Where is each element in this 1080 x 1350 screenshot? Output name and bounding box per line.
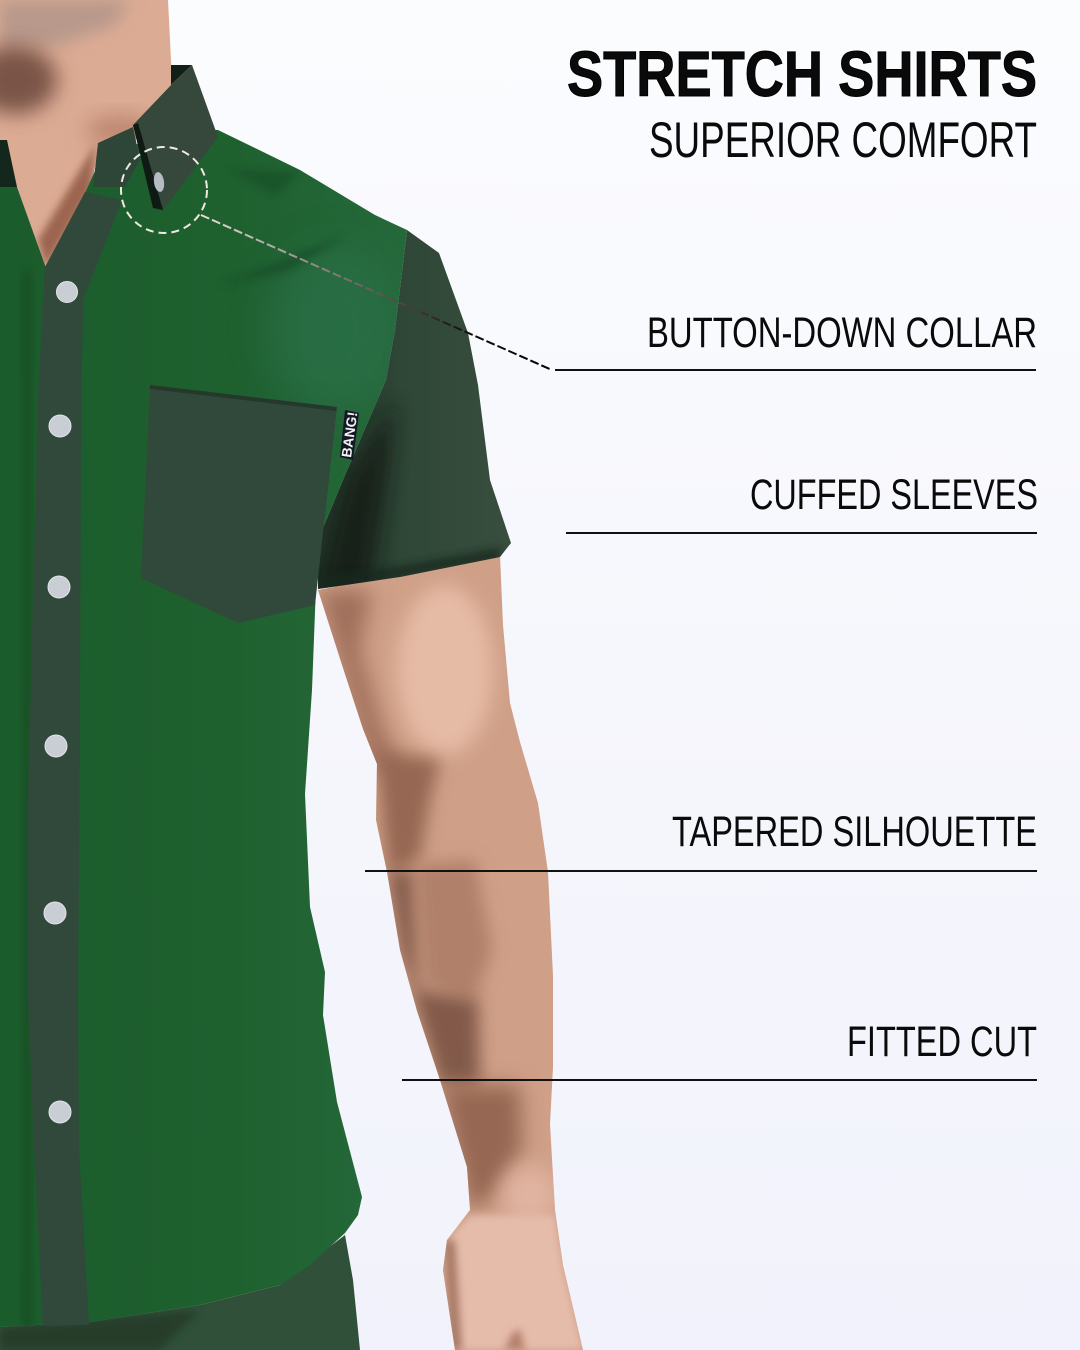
wrist shadow (440, 1085, 522, 1210)
collar (93, 65, 218, 210)
photo: model wearing shirt (0, 0, 600, 1350)
left collar (0, 140, 17, 187)
shorts (0, 1235, 360, 1350)
collar callout circle (121, 147, 207, 233)
placket (28, 192, 122, 1326)
upper arm highlight (397, 585, 493, 755)
collar button (153, 171, 165, 193)
pocket (141, 385, 337, 623)
forearm muscle (417, 860, 492, 1000)
upper arm shadow (318, 590, 400, 770)
neck and chin (0, 0, 175, 275)
arm and hand (318, 556, 583, 1350)
buttons (44, 282, 78, 1123)
forearm shadow (388, 870, 480, 1085)
leader line (201, 215, 552, 370)
elbow crease (376, 750, 440, 872)
sleeve (310, 225, 515, 595)
pocket label: BANG! (338, 411, 360, 458)
shirt body (0, 120, 420, 1340)
